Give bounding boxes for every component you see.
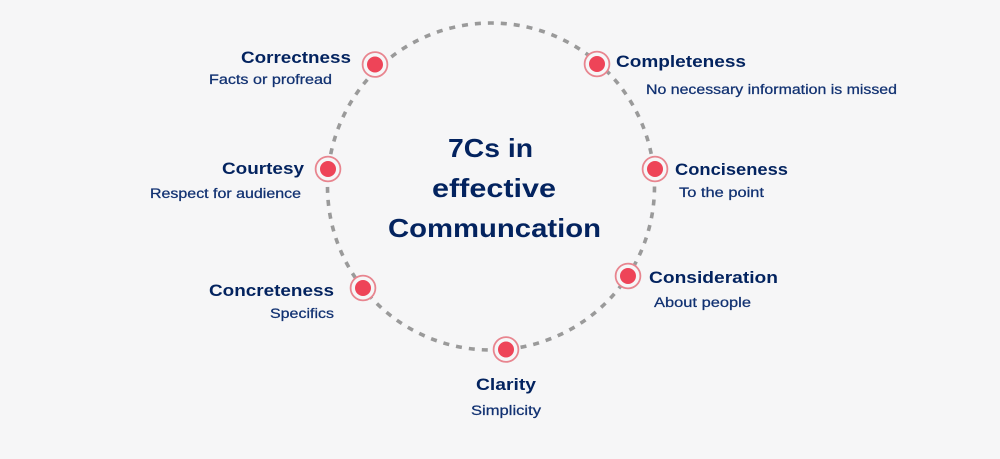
label: Correctness <box>209 48 351 87</box>
node: Conciseness <box>643 157 667 181</box>
label: Completeness <box>616 52 897 97</box>
label: Concreteness <box>209 281 334 321</box>
node: Clarity <box>494 337 518 362</box>
node: Courtesy <box>316 157 340 181</box>
label: Conciseness <box>675 160 788 200</box>
label: Consideration: About people <box>654 295 751 310</box>
label: Correctness: Facts or profread <box>209 72 332 87</box>
label: Completeness: Completeness <box>616 52 746 71</box>
center title: 7Cs in <box>448 133 533 163</box>
center title <box>388 133 601 243</box>
label: Consideration <box>649 268 778 310</box>
label: Completeness: No necessary information is missed <box>646 82 897 97</box>
node: Concreteness <box>351 276 375 300</box>
node: Correctness <box>363 52 387 77</box>
label: Courtesy: Courtesy <box>222 159 305 178</box>
node: Completeness <box>585 52 609 76</box>
label: Clarity: Simplicity <box>471 403 541 418</box>
label: Concreteness: Specifics <box>270 306 334 321</box>
label: Courtesy <box>150 159 305 201</box>
label: Conciseness: Conciseness <box>675 160 788 179</box>
label: Conciseness: To the point <box>679 185 764 200</box>
dashed circle <box>328 23 654 350</box>
center title: Communcation <box>388 213 601 243</box>
label: Consideration: Consideration <box>649 268 778 287</box>
label: Concreteness: Concreteness <box>209 281 334 300</box>
label: Clarity <box>471 375 541 418</box>
label: Correctness: Correctness <box>241 48 351 67</box>
label: Courtesy: Respect for audience <box>150 186 301 201</box>
center title: effective <box>432 173 556 203</box>
node: Consideration <box>616 264 640 288</box>
label: Clarity: Clarity <box>476 375 537 394</box>
